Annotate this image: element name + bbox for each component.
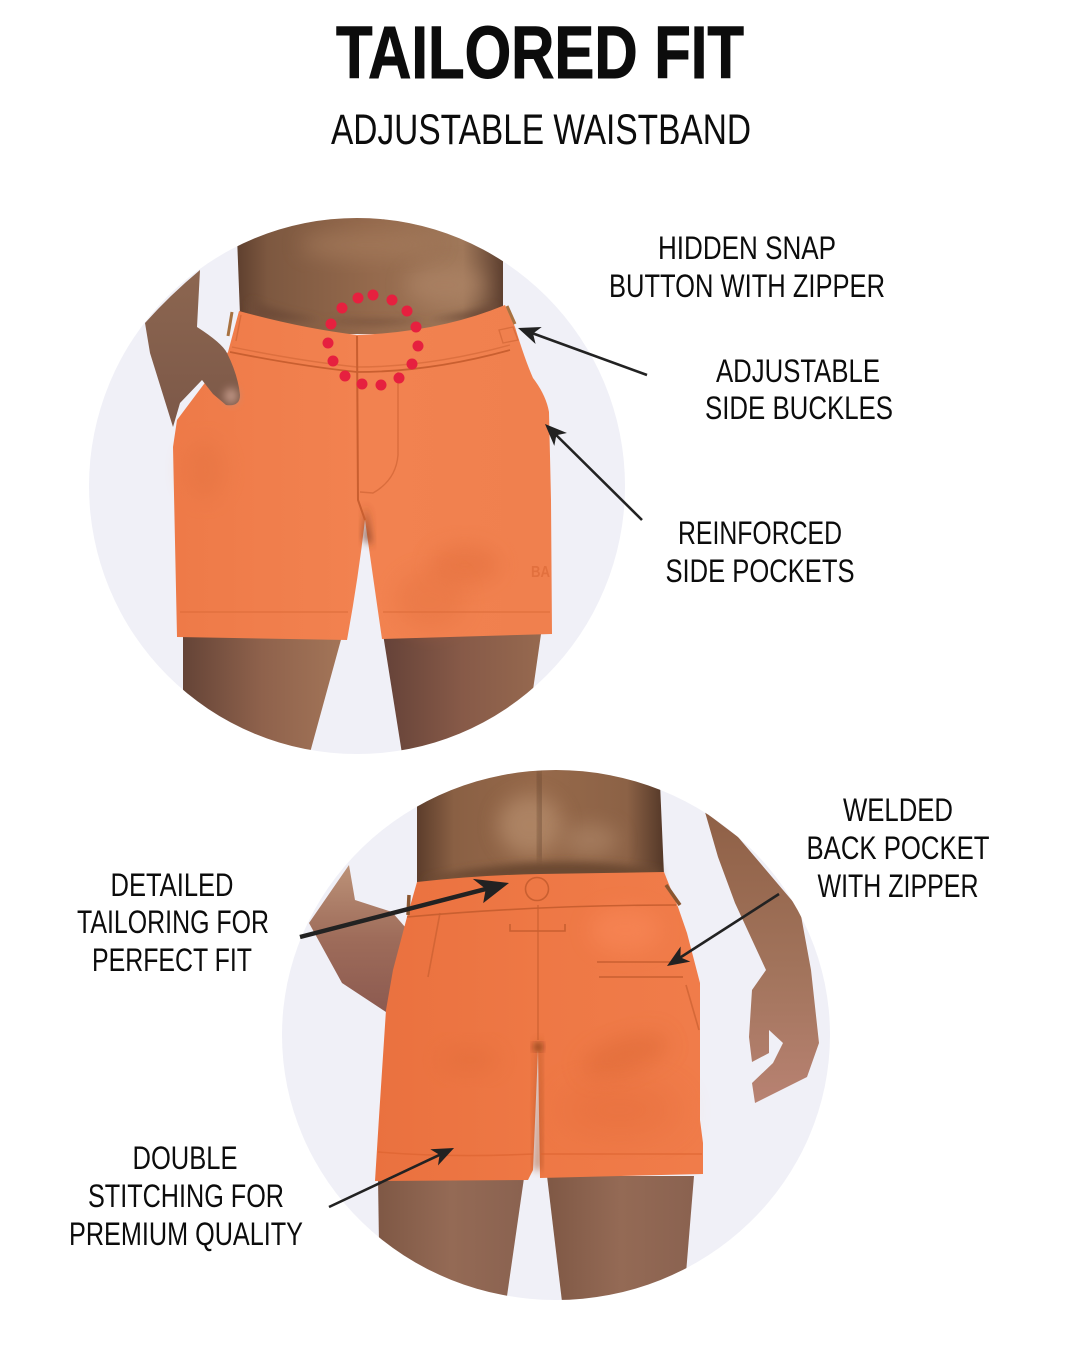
- label: hidden snap: HIDDEN SNAP: [658, 230, 836, 266]
- label: side buckles: SIDE BUCKLES: [705, 390, 893, 426]
- shorts front: [173, 305, 552, 640]
- label: side pockets: REINFORCED: [678, 515, 842, 551]
- label: hidden snap: [609, 230, 885, 304]
- icon: left arm: [309, 865, 405, 1012]
- shorts back: [375, 872, 703, 1181]
- title: TAILORED FIT: [336, 11, 744, 94]
- icon: back left leg: [378, 1180, 524, 1296]
- icon: back torso: [417, 770, 666, 882]
- icon: left leg: [183, 636, 342, 760]
- label: tailoring: [77, 867, 269, 978]
- label: stitching: STITCHING FOR: [88, 1178, 284, 1214]
- arrow: to side pocket: [552, 431, 642, 520]
- label: back pocket: WITH ZIPPER: [818, 868, 978, 904]
- label: side buckles: [705, 353, 893, 426]
- label: back pocket: BACK POCKET: [806, 830, 990, 866]
- label: back pocket: WELDED: [843, 792, 953, 828]
- red dotted circle: [322, 290, 424, 390]
- faint logo text: BA: [531, 564, 550, 581]
- arrow: to hem stitching: [329, 1152, 445, 1207]
- label: stitching: DOUBLE: [132, 1140, 238, 1176]
- label: side pockets: SIDE POCKETS: [666, 553, 854, 589]
- label: side pockets: [666, 515, 854, 589]
- label: tailoring: PERFECT FIT: [92, 942, 252, 978]
- back seams and pocket: [378, 905, 702, 1156]
- icon: right leg: [383, 634, 541, 760]
- icon: right arm: [705, 812, 819, 1103]
- waistband seams and fly: [180, 315, 550, 612]
- icon: torso: [236, 210, 503, 334]
- arrow: to back pocket: [675, 894, 779, 961]
- icon: arm and hand: [145, 270, 240, 427]
- arrow: to side buckle: [527, 331, 647, 375]
- icon: back right leg: [547, 1176, 694, 1310]
- label: back pocket: [806, 792, 990, 904]
- icon: fingertip: [224, 388, 238, 404]
- subtitle: ADJUSTABLE WAISTBAND: [331, 106, 751, 154]
- label: tailoring: DETAILED: [110, 867, 234, 903]
- photo: front view of shorts: [89, 210, 625, 760]
- label: tailoring: TAILORING FOR: [77, 904, 269, 940]
- photo: back view of shorts: [282, 760, 830, 1310]
- arrow: to waistband: [300, 886, 499, 937]
- waistband logo: [526, 878, 548, 900]
- label: hidden snap: BUTTON WITH ZIPPER: [609, 268, 885, 304]
- label: stitching: PREMIUM QUALITY: [69, 1216, 303, 1252]
- icon: back buckles: [408, 885, 680, 915]
- label: side buckles: ADJUSTABLE: [716, 353, 880, 389]
- label: stitching: [69, 1140, 303, 1252]
- icon: buckles: [228, 306, 515, 336]
